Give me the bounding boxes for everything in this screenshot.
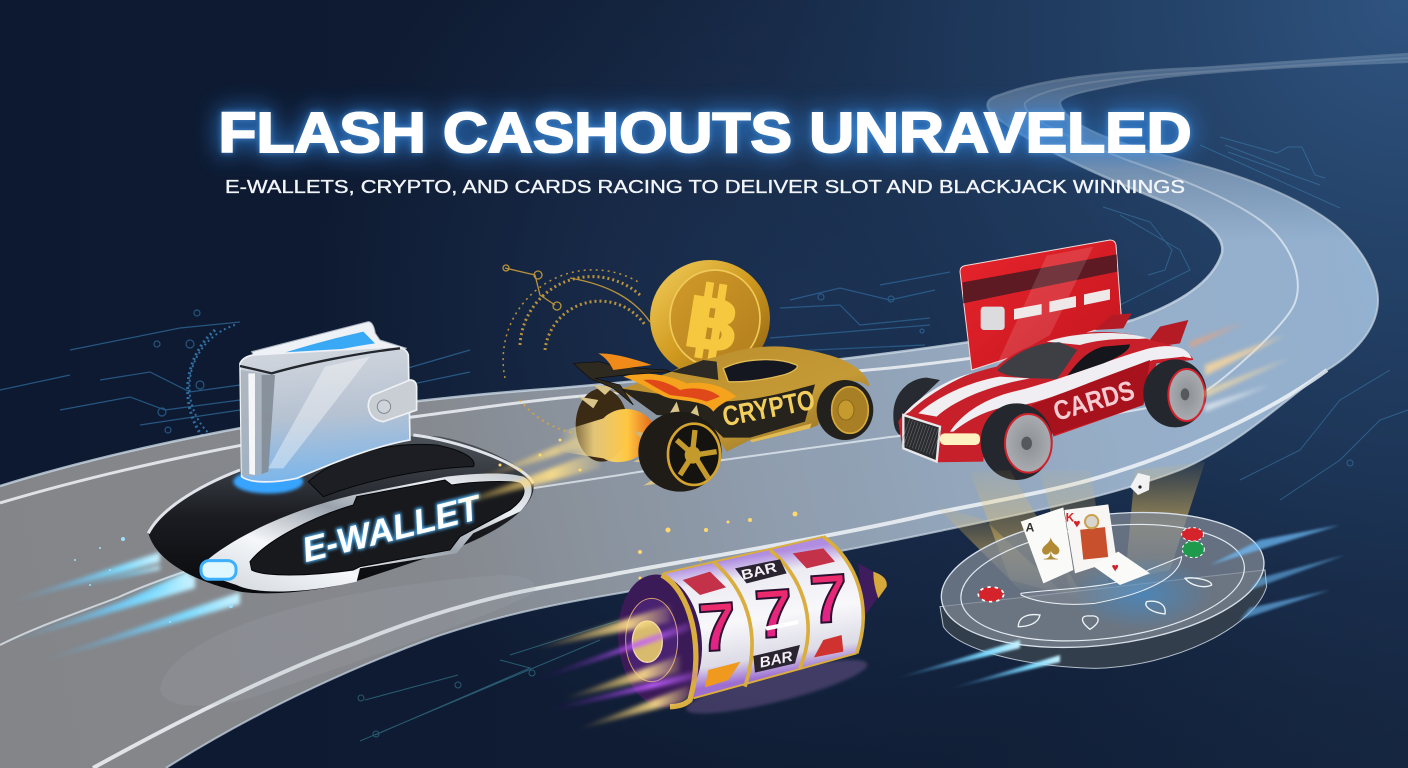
blue particles bbox=[74, 537, 233, 623]
front wheel bbox=[817, 380, 873, 440]
body silver edge bbox=[148, 435, 533, 533]
speed streaks: e-wallet bbox=[0, 552, 240, 665]
spade spots bbox=[1018, 578, 1212, 629]
windshield bbox=[997, 342, 1077, 379]
slot glow bbox=[682, 650, 871, 724]
side panel bbox=[1032, 360, 1150, 435]
icon: dice bbox=[1130, 473, 1150, 495]
icon: credit card bbox=[960, 240, 1122, 370]
ace card: A bbox=[1026, 521, 1035, 535]
car body bbox=[613, 346, 869, 452]
BAR top: BAR bbox=[740, 559, 778, 583]
wing flame bbox=[598, 353, 652, 370]
rear wheel bbox=[633, 402, 722, 492]
glitch on middle seven bbox=[765, 620, 798, 631]
side stripe bbox=[950, 346, 1192, 432]
speed streaks: slot bbox=[530, 605, 700, 730]
rear spikes bbox=[578, 385, 613, 408]
lane line: second bbox=[0, 357, 970, 504]
circuit lines: left bbox=[0, 310, 470, 445]
car label: CRYPTO bbox=[720, 384, 817, 432]
ace card: ♠ bbox=[1041, 526, 1060, 567]
label text: E-WALLET bbox=[298, 488, 486, 570]
silver trim bbox=[203, 473, 532, 592]
title: FLASH CASHOUTS UNRAVELED bbox=[218, 101, 1192, 165]
sevens: 7 bbox=[696, 588, 739, 667]
gold sparks bbox=[498, 438, 798, 580]
axle knob bbox=[858, 563, 887, 618]
flat card: ♥ bbox=[1112, 561, 1119, 575]
circuit lines: centre bbox=[770, 272, 950, 352]
left cap bbox=[612, 570, 708, 712]
reels bbox=[663, 537, 863, 698]
table inner line bbox=[954, 510, 1251, 656]
vehicle body bbox=[148, 436, 534, 593]
gold rings bbox=[663, 537, 863, 698]
car body bbox=[898, 332, 1193, 462]
icon: bitcoin coin: B bbox=[680, 281, 744, 368]
exhaust fire bbox=[560, 409, 657, 462]
beams bbox=[935, 462, 1205, 600]
hood stripes bbox=[902, 372, 973, 417]
panel: crypto car bbox=[560, 260, 873, 492]
side window bbox=[1067, 344, 1130, 376]
title: FLASH CASHOUTS UNRAVELED bbox=[218, 101, 1192, 165]
grille bbox=[903, 415, 940, 462]
flat card bbox=[1092, 552, 1150, 585]
symbols bbox=[683, 548, 843, 687]
lane line: centre bbox=[0, 58, 1408, 645]
BAR top bbox=[735, 559, 787, 583]
sevens bbox=[696, 560, 851, 667]
gold circuit ring bbox=[503, 265, 650, 435]
glow ring under wallet bbox=[233, 470, 303, 494]
betting arc bbox=[1021, 557, 1182, 604]
BAR bottom bbox=[753, 645, 800, 673]
roof stripe bbox=[1047, 333, 1148, 345]
king card: ♥ bbox=[1073, 516, 1080, 530]
red chip bbox=[978, 587, 1004, 602]
speed streaks: cards bbox=[1190, 322, 1290, 412]
rear mass bbox=[576, 388, 628, 462]
label text: E-WALLET bbox=[298, 488, 486, 570]
circuit lines: below road bbox=[358, 620, 620, 741]
BAR bottom: BAR bbox=[758, 649, 794, 672]
speed streaks: table bbox=[890, 525, 1345, 690]
flames bbox=[623, 374, 737, 412]
car label: CARDS bbox=[1050, 374, 1138, 427]
black side panel bbox=[620, 384, 815, 438]
label plate bbox=[250, 480, 524, 575]
chip stack bbox=[1182, 528, 1204, 558]
rear wing bbox=[573, 362, 670, 405]
table side bbox=[940, 570, 1267, 668]
headlight bbox=[201, 561, 236, 579]
panel: blackjack table bbox=[934, 496, 1272, 668]
side window bbox=[723, 360, 797, 382]
far front tire bbox=[893, 378, 940, 435]
gold sill bbox=[750, 423, 812, 442]
sevens: 7 bbox=[807, 560, 851, 638]
icon: wallet bbox=[240, 322, 417, 482]
ace card bbox=[1021, 507, 1073, 583]
headlight bbox=[940, 433, 980, 445]
spoilers bbox=[1095, 313, 1188, 348]
king card bbox=[1064, 504, 1117, 573]
panel: e-wallet hover vehicle bbox=[148, 322, 534, 593]
sevens: 7 bbox=[752, 575, 796, 653]
circuit lines: right bbox=[1103, 137, 1408, 500]
king card: K bbox=[1066, 511, 1075, 525]
road edge: upper bbox=[0, 54, 1408, 486]
e-wallet reflection bbox=[160, 575, 536, 706]
subtitle: E-WALLETS, CRYPTO, AND CARDS RACING TO DELIVER SLOT AND BLACKJACK WINNINGS bbox=[225, 177, 1185, 197]
front wheel bbox=[981, 403, 1053, 480]
lane line: thick bbox=[93, 370, 1327, 768]
icon: bitcoin coin bbox=[650, 260, 770, 377]
rear wheel bbox=[1143, 359, 1207, 427]
gold spark streak bbox=[440, 432, 600, 510]
panel: cards car bbox=[893, 240, 1207, 480]
black cabin bbox=[672, 360, 718, 380]
top window bbox=[308, 444, 474, 497]
panel: slot reel bbox=[612, 537, 887, 724]
table top bbox=[934, 496, 1272, 664]
title: FLASH CASHOUTS UNRAVELED bbox=[218, 101, 1192, 165]
